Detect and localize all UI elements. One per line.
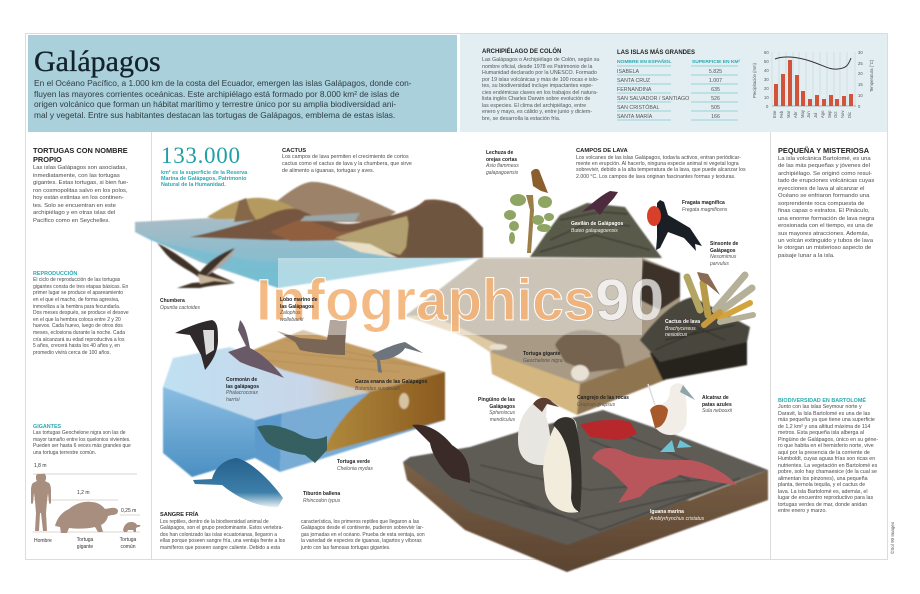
label: lechuza: orejas cortas xyxy=(486,156,517,162)
table rows: 5.825 xyxy=(709,68,722,74)
label: tortuga verde: Chelonia mydas xyxy=(337,466,373,472)
text: biodiversidad: Junto con las islas Seymour norte y xyxy=(778,404,862,410)
table rows: 635 xyxy=(711,86,720,92)
text: biodiversidad: Pingüino de Galápagos, único en su géne- xyxy=(778,436,878,442)
intro text: fluyen las mayores corrientes oceánicas. Este archipiélago está formado por 8.000 km² de islas de xyxy=(34,89,399,99)
label: gavilán: Buteo galapagoensis xyxy=(571,228,618,234)
text: pequeña y misteriosa: La isla volcánica Bartolomé, es una xyxy=(778,156,871,162)
text: reproducción xyxy=(33,277,129,356)
text: archipiélago: enero y mayo, es cálido y, entre junio y diciem- xyxy=(482,109,592,115)
text: biodiversidad: entre enero y marzo. xyxy=(778,508,827,514)
text: biodiversidad: Humboldt, cuyas aguas frías son ricas en xyxy=(778,456,875,462)
title: Galápagos xyxy=(34,44,161,78)
text: pequeña y misteriosa: una enorme formación de lava negra xyxy=(778,216,874,222)
water block xyxy=(163,330,445,477)
size labels xyxy=(34,463,136,550)
label: sinsonte: Galápagos xyxy=(710,248,736,254)
climate chart: Jun xyxy=(806,111,811,118)
climate chart: Nov xyxy=(840,110,845,118)
table rows: 166 xyxy=(711,114,720,120)
text: pequeña y misteriosa: paisaje lunar a la isla. xyxy=(778,253,835,259)
label: sinsonte: Nesomimus xyxy=(710,254,736,260)
climate chart: 10 xyxy=(858,93,863,98)
text: cactus: de alimento a iguanas, tortugas y aves. xyxy=(282,168,374,174)
intro text: origen volcánico que forman un hábitat marítimo y terrestre único por su amplia biodiversidad ani- xyxy=(34,99,396,109)
text: sangre fría col 1: Los reptiles, dentro de la biodiversidad animal de xyxy=(160,518,269,524)
label: lechuza: Lechuza de xyxy=(486,150,513,156)
text: reproducción: promedio vivirá cerca de 100 años. xyxy=(33,350,111,356)
climate chart: Temperatura (°C) xyxy=(869,59,874,92)
label: lechuza xyxy=(486,150,519,176)
text: biodiversidad: lugar de encuentro reproductivo para las xyxy=(778,495,873,501)
label: cactus de lava: Brachycereus xyxy=(665,326,696,332)
text: sangre fría col 2: la variedad de especies de iguanas, lagartos y víboras xyxy=(301,538,422,544)
icon: giant tortoise silhouette xyxy=(55,502,118,533)
text: cactus: Los campos de lava permiten el crecimiento de cortos xyxy=(282,154,409,160)
climate chart: 0 xyxy=(858,104,861,109)
label: cangrejo xyxy=(577,395,629,408)
text: reproducción: en el que el macho, de forma agresiva, xyxy=(33,297,119,303)
label: giant tortoise height: 1,2 m xyxy=(77,490,90,496)
text: pequeña y misteriosa: archipiélago. Se originó como resul- xyxy=(778,171,872,177)
text: archipiélago: bre, se desarrolla la estación fría. xyxy=(482,116,560,122)
heading: archipiélago: ARCHIPIÉLAGO DE COLÓN xyxy=(482,49,561,55)
intro text: mal y vegetal. Entre sus habitantes destacan las tortugas de Galápagos, emblema de estas islas. xyxy=(34,110,395,120)
text: pequeña y misteriosa: un volcán extinguido y tubos de lava xyxy=(778,238,873,244)
label: sinsonte xyxy=(710,241,738,266)
text: biodiversidad: metros. Esta pequeña isla alberga al xyxy=(778,430,864,436)
icon: lava cactus xyxy=(687,275,753,325)
table header xyxy=(617,59,740,65)
label: tiburón ballena: Tiburón ballena xyxy=(303,491,340,497)
text: sangre fría col 1: Galápagos, son el grupo predominante. Estos vertebra- xyxy=(160,525,283,531)
heading: tortugas: PROPIO xyxy=(33,155,62,164)
text: reproducción: cría alcanzará su edad reproductiva a los xyxy=(33,337,124,343)
heading: reproducción: REPRODUCCIÓN xyxy=(33,270,77,276)
climate chart: May xyxy=(800,109,805,118)
caption: 133.000: Natural de la Humanidad. xyxy=(161,182,226,188)
text: sangre fría col 2: Galápagos desde el continente, pudieron sobrevivir lar- xyxy=(301,525,424,531)
text: pequeña y misteriosa: sus mayores atracciones. Además, xyxy=(778,231,869,237)
label: chumbera: Opuntia cactoides xyxy=(160,304,200,310)
text: sangre fría col 2: gas jornadas en el océano. Prueba de esta ventaja, son xyxy=(301,532,425,538)
climate chart: Oct xyxy=(833,111,838,118)
text: pequeña y misteriosa: tado de erupciones volcánicas cuyas xyxy=(778,178,874,184)
text: reproducción: en el que la hembra coloca entre 2 y 20 xyxy=(33,317,121,323)
icon: sea lion on sand xyxy=(277,320,347,355)
climate chart: 50 xyxy=(764,59,769,64)
label: tortuga gigante xyxy=(523,351,562,364)
climate chart: Mar xyxy=(786,110,791,118)
label: fragata: Fregata magnificens xyxy=(682,206,727,212)
text: campos de lava: sobrevivir, debido a la alta temperatura de la lava, que puede alcanzar los xyxy=(576,167,746,173)
text: pequeña y misteriosa: Océano se enfriaron formando una xyxy=(778,193,869,199)
label: cactus de lava xyxy=(665,319,700,338)
text: reproducción: 5 años, crecerá hasta los 40 años y, en xyxy=(33,343,120,349)
label: gavilán xyxy=(571,221,624,234)
label: iguana xyxy=(650,509,704,522)
icon: galapagos penguins xyxy=(518,398,582,513)
text: pequeña y misteriosa: finas capas o estratos. El Pináculo, xyxy=(778,208,870,214)
text: tortugas xyxy=(33,165,128,224)
climate chart: Abr xyxy=(793,111,798,118)
climate chart: 0 xyxy=(766,104,769,109)
text: sangre fría col 2: junto con las famosas tortugas gigantes. xyxy=(301,544,390,550)
size comparison chart xyxy=(31,474,140,533)
text: biodiversidad: ro que habita en el hemisferio norte, vive xyxy=(778,443,874,449)
label: cormorán: las galápagos xyxy=(226,384,259,390)
heading: pequeña y misteriosa: PEQUEÑA Y MISTERIOSA xyxy=(778,146,869,155)
text: sangre fría col 1 xyxy=(160,518,285,550)
label: garza xyxy=(355,379,428,392)
text: tortugas: gigantes. Estas tortugas, si bien fue- xyxy=(33,180,128,186)
table rows xyxy=(617,68,722,120)
text: tortugas: ron cosmopolitas salvo en los polos, xyxy=(33,188,128,194)
label: tortuga verde: Tortuga verde xyxy=(337,459,370,465)
label: lobo marino: las Galápagos xyxy=(280,304,314,310)
icon: pelican xyxy=(157,243,235,288)
text: reproducción: primer lugar se produce el apareamiento xyxy=(33,290,123,296)
label: gavilán: Gavilán de Galápagos xyxy=(571,221,623,227)
label: cactus de lava: nesioticus xyxy=(665,332,687,338)
text: sangre fría col 1: dos han colonizado las islas ecuatorianas, llegaron a xyxy=(160,532,277,538)
text: biodiversidad: aquí por la presencia de la corriente de xyxy=(778,450,870,456)
central sand block with tortoise xyxy=(405,258,680,415)
climate chart: 20 xyxy=(858,71,863,76)
label: chumbera: Chumbera xyxy=(160,298,185,304)
text: gigantes: mayor tamaño entre los quelonios vivientes. xyxy=(33,437,131,443)
text: gigantes: Las tortugas Geochelone nigra son las de xyxy=(33,430,126,436)
label: pingüino: mendiculus xyxy=(490,416,515,422)
label: alcatraz: Alcatraz de xyxy=(702,395,729,401)
table rows: 526 xyxy=(711,96,720,102)
text: tortugas: hoy están extintas en los continen- xyxy=(33,195,124,201)
label: pingüino xyxy=(478,397,515,422)
table rows: SAN CRISTÓBAL xyxy=(617,104,659,110)
foreground lava block xyxy=(403,410,768,572)
text: pequeña y misteriosa: sorprendente roca compuesta de xyxy=(778,201,864,207)
icon: marine iguana xyxy=(592,448,737,503)
credit: ©Sol 90 Images xyxy=(890,522,895,554)
label: alcatraz: patas azules xyxy=(702,402,732,408)
climate chart: Dic xyxy=(847,112,852,118)
table header: NOMBRE EN ESPAÑOL xyxy=(617,60,672,65)
panel: title background xyxy=(28,35,457,132)
label: sinsonte: parvulus xyxy=(710,260,729,266)
label: common tortoise height: 0,25 m xyxy=(121,508,136,514)
icon: flightless cormorant xyxy=(228,320,284,378)
caption: 133.000 xyxy=(161,170,248,188)
label: lobo marino: wollebaeki xyxy=(280,316,303,322)
climate chart: Sep xyxy=(827,110,832,118)
text: archipiélago: tes, su biodiversidad incluye impactantes espe- xyxy=(482,83,593,89)
label: lechuza: Asio flammeus xyxy=(486,163,519,169)
heading: gigantes: GIGANTES xyxy=(33,424,61,430)
label: human height: 1,8 m xyxy=(34,463,47,469)
text: pequeña y misteriosa: erosionada con el tiempo, es una de xyxy=(778,223,873,229)
climate chart: 30 xyxy=(764,77,769,82)
text: reproducción: El ciclo de reproducción de las tortugas xyxy=(33,277,120,283)
climate chart: 40 xyxy=(764,68,769,73)
text: biodiversidad: tortugas verdes de mar, donde anidan xyxy=(778,502,867,508)
text: tortugas: Pacífico como en Seychelles. xyxy=(33,218,110,224)
label: iguana: Amblyrhynchus cristatus xyxy=(650,516,704,522)
label: cormorán: Cormorán de xyxy=(226,377,257,383)
text: tortugas: Las islas Galápagos son asociadas, xyxy=(33,165,127,171)
table rows: SANTA CRUZ xyxy=(617,78,650,84)
text: campos de lava xyxy=(576,154,746,180)
text: sangre fría col 2: característica, los primeros reptiles que llegaron a las xyxy=(301,518,419,524)
label: lobo marino xyxy=(280,297,318,322)
icon: blue-footed booby xyxy=(648,383,695,452)
table rows: SANTA MARÍA xyxy=(617,114,652,120)
label: cangrejo: Grapsus grapsus xyxy=(577,402,615,408)
label: tortuga gigante: Tortuga xyxy=(77,537,93,543)
heading: tortugas xyxy=(33,146,128,164)
heading: biodiversidad: BIODIVERSIDAD EN BARTOLOMÉ xyxy=(778,398,866,404)
text: biodiversidad: de 1,2 km² y una altitud máxima de 114 xyxy=(778,424,870,430)
label: cormorán xyxy=(226,377,259,402)
text: pequeña y misteriosa: le otorgan un misterioso aspecto de xyxy=(778,245,871,251)
label: fragata: Fragata magnífica xyxy=(682,200,725,206)
sea plane xyxy=(135,218,480,288)
heading: sangre fría: SANGRE FRÍA xyxy=(160,512,199,518)
label: cormorán: harrisi xyxy=(226,396,240,402)
icon: human silhouette xyxy=(31,474,51,531)
text: gigantes: una tortuga terrestre común. xyxy=(33,450,96,456)
lava rock with hawk xyxy=(530,203,750,380)
label: cactus de lava: Cactus de lava xyxy=(665,319,700,325)
climate chart: Ene xyxy=(772,110,777,118)
text: biodiversidad: planta, tiernola tequila, y el cactus de xyxy=(778,482,865,488)
table rows: ISABELA xyxy=(617,68,639,74)
heading: campos de lava: CAMPOS DE LAVA xyxy=(576,148,628,154)
label: iguana: Iguana marina xyxy=(650,509,684,515)
icon: sea lion on rock xyxy=(412,425,470,483)
text: biodiversidad: Daravit, la Isla Bartolomé es una de las xyxy=(778,410,870,416)
label: pingüino: Spheniscus xyxy=(489,410,515,416)
heading: tortugas: TORTUGAS CON NOMBRE xyxy=(33,146,128,155)
label: tortuga verde xyxy=(337,459,373,472)
icon: galapagos hawk xyxy=(582,191,618,215)
text: sangre fría col 1: ellas porque poseen sangre fría, una ventaja frente a los xyxy=(160,538,285,544)
icon: sally lightfoot crab xyxy=(580,420,637,440)
text: tortugas: inmediatamente, con las tortugas xyxy=(33,172,120,178)
icon: opuntia cactus tree xyxy=(504,194,554,253)
climate chart: 60 xyxy=(764,50,769,55)
text: biodiversidad: pobre, solo hay chamaesice (de la cual se xyxy=(778,469,877,475)
icon: booby left xyxy=(175,320,218,370)
text: archipiélago: cies endémicas claves en los trabajos del natura- xyxy=(482,90,598,96)
text: reproducción: gigantes consta de tres etapas básicas. En xyxy=(33,284,128,290)
icon: lava heron xyxy=(372,342,423,373)
icon: frigatebird xyxy=(647,200,702,251)
watermark: Infographics xyxy=(256,268,595,333)
label: sinsonte: Sinsonte de xyxy=(710,241,738,247)
text: cactus xyxy=(282,154,412,174)
climate chart xyxy=(752,50,874,118)
climate chart: Jul xyxy=(813,113,818,118)
intro text xyxy=(34,78,412,120)
label: alcatraz xyxy=(702,395,732,414)
text: tortugas: archipiélago y en otras islas del xyxy=(33,210,115,216)
text: tortugas: tes. Solo se encuentran en este xyxy=(33,202,116,208)
text: archipiélago: las especies. El clima del archipiélago, entre xyxy=(482,102,586,108)
label: cormorán: Phalacrocorax xyxy=(226,390,258,396)
label: tortuga común xyxy=(120,537,136,550)
table rows: 505 xyxy=(711,104,720,110)
icon: common tortoise silhouette xyxy=(123,522,140,532)
table rows: 1.007 xyxy=(709,78,722,84)
text: reproducción: huevos. Cada huevo, luego de otros dos xyxy=(33,323,123,329)
icon: short-eared owl xyxy=(531,169,548,193)
text: biodiversidad: nutrientes. La vegetación en Bartolomé es xyxy=(778,462,877,468)
label: tortuga gigante xyxy=(76,537,94,550)
label: lobo marino: Lobo marino de xyxy=(280,297,318,303)
text: archipiélago: lista inglés Charles Darwin sobre evolución de xyxy=(482,96,590,102)
text: gigantes: Pueden ser hasta 6 veces más grandes que xyxy=(33,443,131,449)
text: campos de lava: 2.000 °C. Los campos de lava originan fascinantes formas y texturas. xyxy=(576,174,736,180)
text: reproducción: inmoviliza a la hembra para fecundarla. xyxy=(33,304,120,310)
label: tortuga gigante: gigante xyxy=(77,544,93,550)
island landscape xyxy=(135,182,483,288)
label: lobo marino: Zalophus xyxy=(280,310,301,316)
label: hombre: Hombre xyxy=(34,538,52,544)
text: biodiversidad: lava. La isla Bartolomé es, además, el xyxy=(778,488,868,494)
icon: finch xyxy=(697,272,720,295)
text: archipiélago: Las Galápagos o Archipiélago de Colón, según su xyxy=(482,57,600,63)
text: sangre fría col 2 xyxy=(300,518,425,550)
text: biodiversidad: más pequeña ya que tiene una superficie xyxy=(778,417,875,423)
table header: SUPERFICIE EN KM² xyxy=(692,60,740,65)
climate chart: 25 xyxy=(858,61,863,66)
text: gigantes xyxy=(33,430,131,456)
text: biodiversidad: alimentan los pinzones), una pequeña xyxy=(778,476,868,482)
label: fragata xyxy=(682,200,728,212)
text: pequeña y misteriosa: eyecciones de lava al alcanzar el xyxy=(778,186,864,192)
text: reproducción: meses, eclosiona durante la noche. Cada xyxy=(33,330,125,336)
climate chart: Feb xyxy=(779,110,784,118)
label: garza: Garza enana de las Galápagos xyxy=(355,379,427,385)
intro text: En el Océano Pacífico, a 1.000 km de la costa del Ecuador, emergen las islas Galápagos, donde con- xyxy=(34,78,412,88)
label: tiburón ballena: Rhincodon typus xyxy=(303,498,340,504)
label: pingüino: Pingüino de las xyxy=(478,397,515,403)
table rows: SAN SALVADOR / SANTIAGO xyxy=(617,96,689,102)
climate chart: 30 xyxy=(858,50,863,55)
climate chart: 20 xyxy=(764,86,769,91)
text: pequeña y misteriosa xyxy=(778,156,874,259)
label: tortuga gigante: Tortuga gigante xyxy=(523,351,560,357)
label: tortuga común: común xyxy=(120,544,136,550)
icon: whale shark xyxy=(193,458,283,507)
label: tortuga gigante: Geochelone nigra xyxy=(523,358,562,364)
table rows: FERNANDINA xyxy=(617,86,651,92)
text: archipiélago: nombre oficial, desde 1978 es Patrimonio de la xyxy=(482,64,592,70)
text: archipiélago: Humanidad declarado por la UNESCO. Formado xyxy=(482,70,597,76)
label: garza: Butorides sundevalli xyxy=(355,386,400,392)
text: archipiélago xyxy=(482,57,600,122)
text: sangre fría col 1: mamíferos que poseen sangre caliente. Debido a esta xyxy=(160,544,280,550)
table title: LAS ISLAS MÁS GRANDES xyxy=(617,50,695,56)
label: chumbera xyxy=(160,298,200,310)
label: lechuza: galapagoensis xyxy=(486,170,518,176)
watermark: 90 xyxy=(595,268,664,333)
label: cangrejo: Cangrejo de las rocas xyxy=(577,395,629,401)
table rules xyxy=(617,66,738,120)
translucent band xyxy=(278,258,642,335)
text: biodiversidad xyxy=(778,404,878,514)
label: tiburón ballena xyxy=(303,491,340,504)
text: campos de lava: Los volcanes de las islas Galápagos, todavía activos, entran periódicar- xyxy=(576,154,741,160)
label: tortuga común: Tortuga xyxy=(120,537,136,543)
text: archipiélago: por 19 islas volcánicas y más de 100 rocas e islo- xyxy=(482,76,599,82)
climate chart: Ago xyxy=(820,110,825,118)
figure: 133.000: 133.000 xyxy=(161,143,241,168)
panel: data background xyxy=(460,34,887,132)
text: pequeña y misteriosa: de las más pequeñas y jóvenes del xyxy=(778,163,870,169)
label: alcatraz: Sula nebouxii xyxy=(702,408,732,414)
giant tortoise xyxy=(555,330,625,372)
climate chart: Precipitación (mm) xyxy=(752,62,757,98)
text: campos de lava: mente en erupción. Al hacerlo, ninguna especie animal ni vegetal logra xyxy=(576,161,739,167)
climate chart: 10 xyxy=(764,95,769,100)
icon: sea turtle xyxy=(257,425,327,463)
heading: cactus: CACTUS xyxy=(282,148,306,154)
climate chart: 15 xyxy=(858,82,863,87)
table: largest islands xyxy=(617,48,740,120)
caption: 133.000: km² es la superficie de la Reserva xyxy=(161,170,247,176)
caption: 133.000: Marina de Galápagos, Patrimonio xyxy=(161,176,246,182)
text: cactus: cactus como el cactus de lava y la chumbera, que sirve xyxy=(282,161,412,167)
text: reproducción: Dos meses después, se produce el desove xyxy=(33,310,129,316)
label: pingüino: Galápagos xyxy=(489,404,515,410)
